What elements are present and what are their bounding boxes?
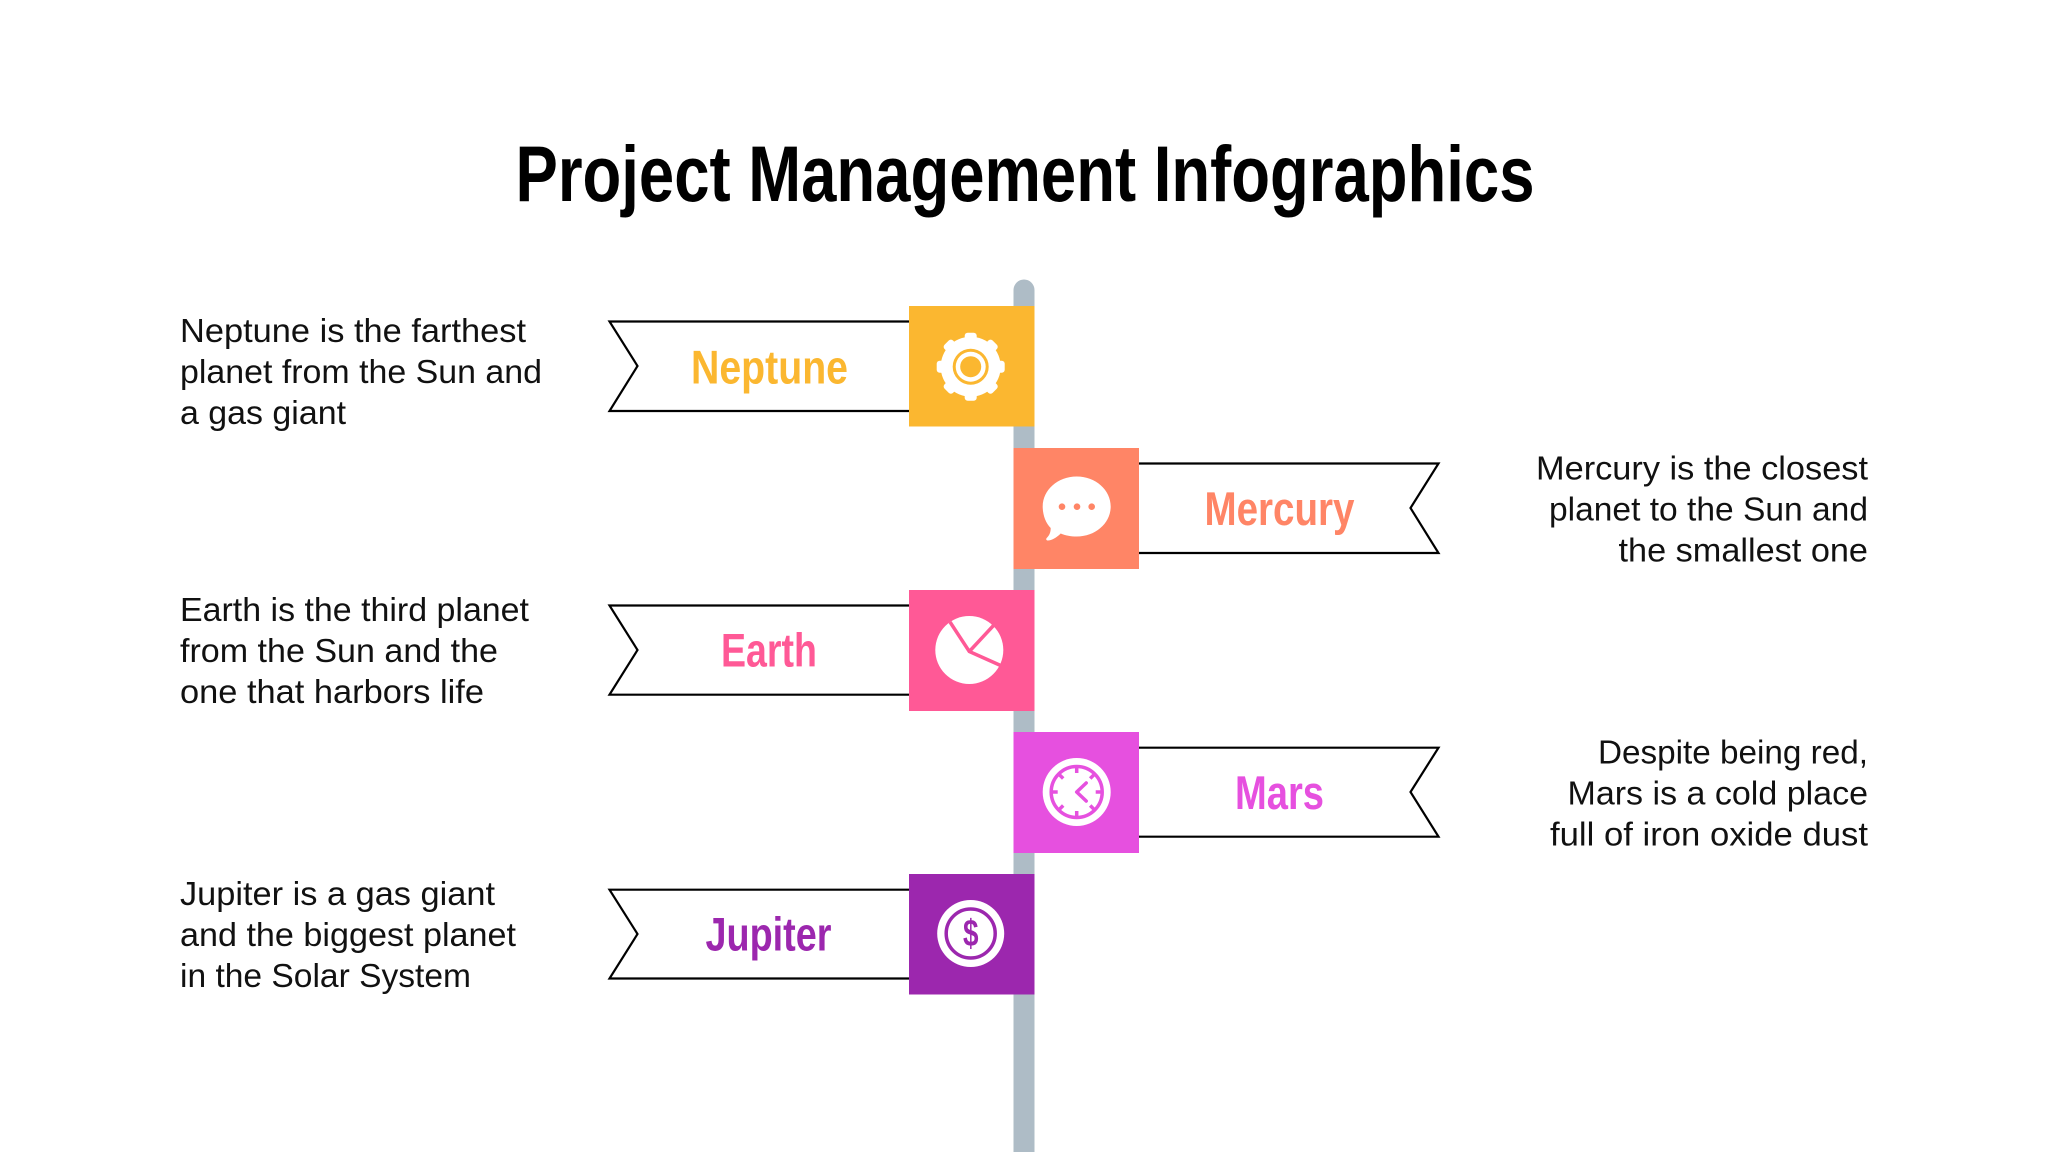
panel: Earth description: Earth is the third planet (180, 592, 530, 629)
panel: Jupiter description (180, 876, 517, 995)
icon box: Neptune (909, 306, 1034, 426)
label: Mercury: Mercury (1204, 482, 1354, 535)
panel: Mars description: Despite being red, (1598, 734, 1868, 772)
icon: speech bubble (1043, 476, 1111, 540)
panel: Neptune description: Neptune is the farthest (180, 313, 527, 350)
panel: Jupiter flag (610, 874, 1034, 994)
icon: dollar coin: $ (963, 913, 978, 955)
label: Mars: Mars (1235, 766, 1324, 819)
panel: Mercury description: Mercury is the closest (1536, 450, 1869, 488)
label: Earth: Earth (721, 624, 817, 677)
icon: dollar coin (937, 900, 1004, 967)
panel: Neptune description: a gas giant (180, 395, 347, 432)
signpost pole (1014, 280, 1034, 1152)
panel: Mercury description: planet to the Sun and (1549, 492, 1868, 528)
ribbon: Mars (1139, 748, 1438, 837)
panel: Neptune flag (610, 306, 1034, 426)
panel: Earth description: one that harbors life (180, 674, 484, 711)
panel: Earth description (180, 592, 530, 711)
panel: Mars description (1550, 734, 1869, 854)
panel: Mars flag (1014, 732, 1438, 853)
panel: Mercury flag (1014, 448, 1438, 569)
label: Neptune: Neptune (691, 340, 848, 394)
label: Jupiter: Jupiter (706, 908, 832, 961)
icon: gear (937, 333, 1005, 401)
panel: Mercury description (1536, 450, 1869, 570)
panel: Mars description: Mars is a cold place (1568, 776, 1868, 812)
panel: Neptune description: planet from the Sun and (180, 354, 542, 391)
panel: Earth flag (610, 590, 1034, 711)
icon: pie chart (935, 616, 1004, 684)
ribbon: Neptune (610, 322, 909, 411)
panel: Earth description: from the Sun and the (180, 633, 498, 670)
panel: Jupiter description: Jupiter is a gas giant (180, 876, 496, 913)
ribbon: Jupiter (610, 890, 909, 978)
panel: Jupiter description: and the biggest planet (180, 917, 517, 954)
icon box: Mercury (1014, 448, 1139, 569)
panel: Mercury description: the smallest one (1618, 532, 1868, 570)
icon box: Earth (909, 590, 1034, 711)
title: Project Management Infographics (516, 129, 1534, 218)
panel: Neptune description (180, 313, 542, 432)
icon: clock (1043, 758, 1111, 826)
ribbon: Mercury (1139, 464, 1438, 553)
icon box: Mars (1014, 732, 1139, 853)
ribbon: Earth (610, 606, 909, 695)
panel: Jupiter description: in the Solar System (180, 958, 471, 995)
icon box: Jupiter (909, 874, 1034, 994)
panel: Mars description: full of iron oxide dust (1550, 816, 1869, 854)
